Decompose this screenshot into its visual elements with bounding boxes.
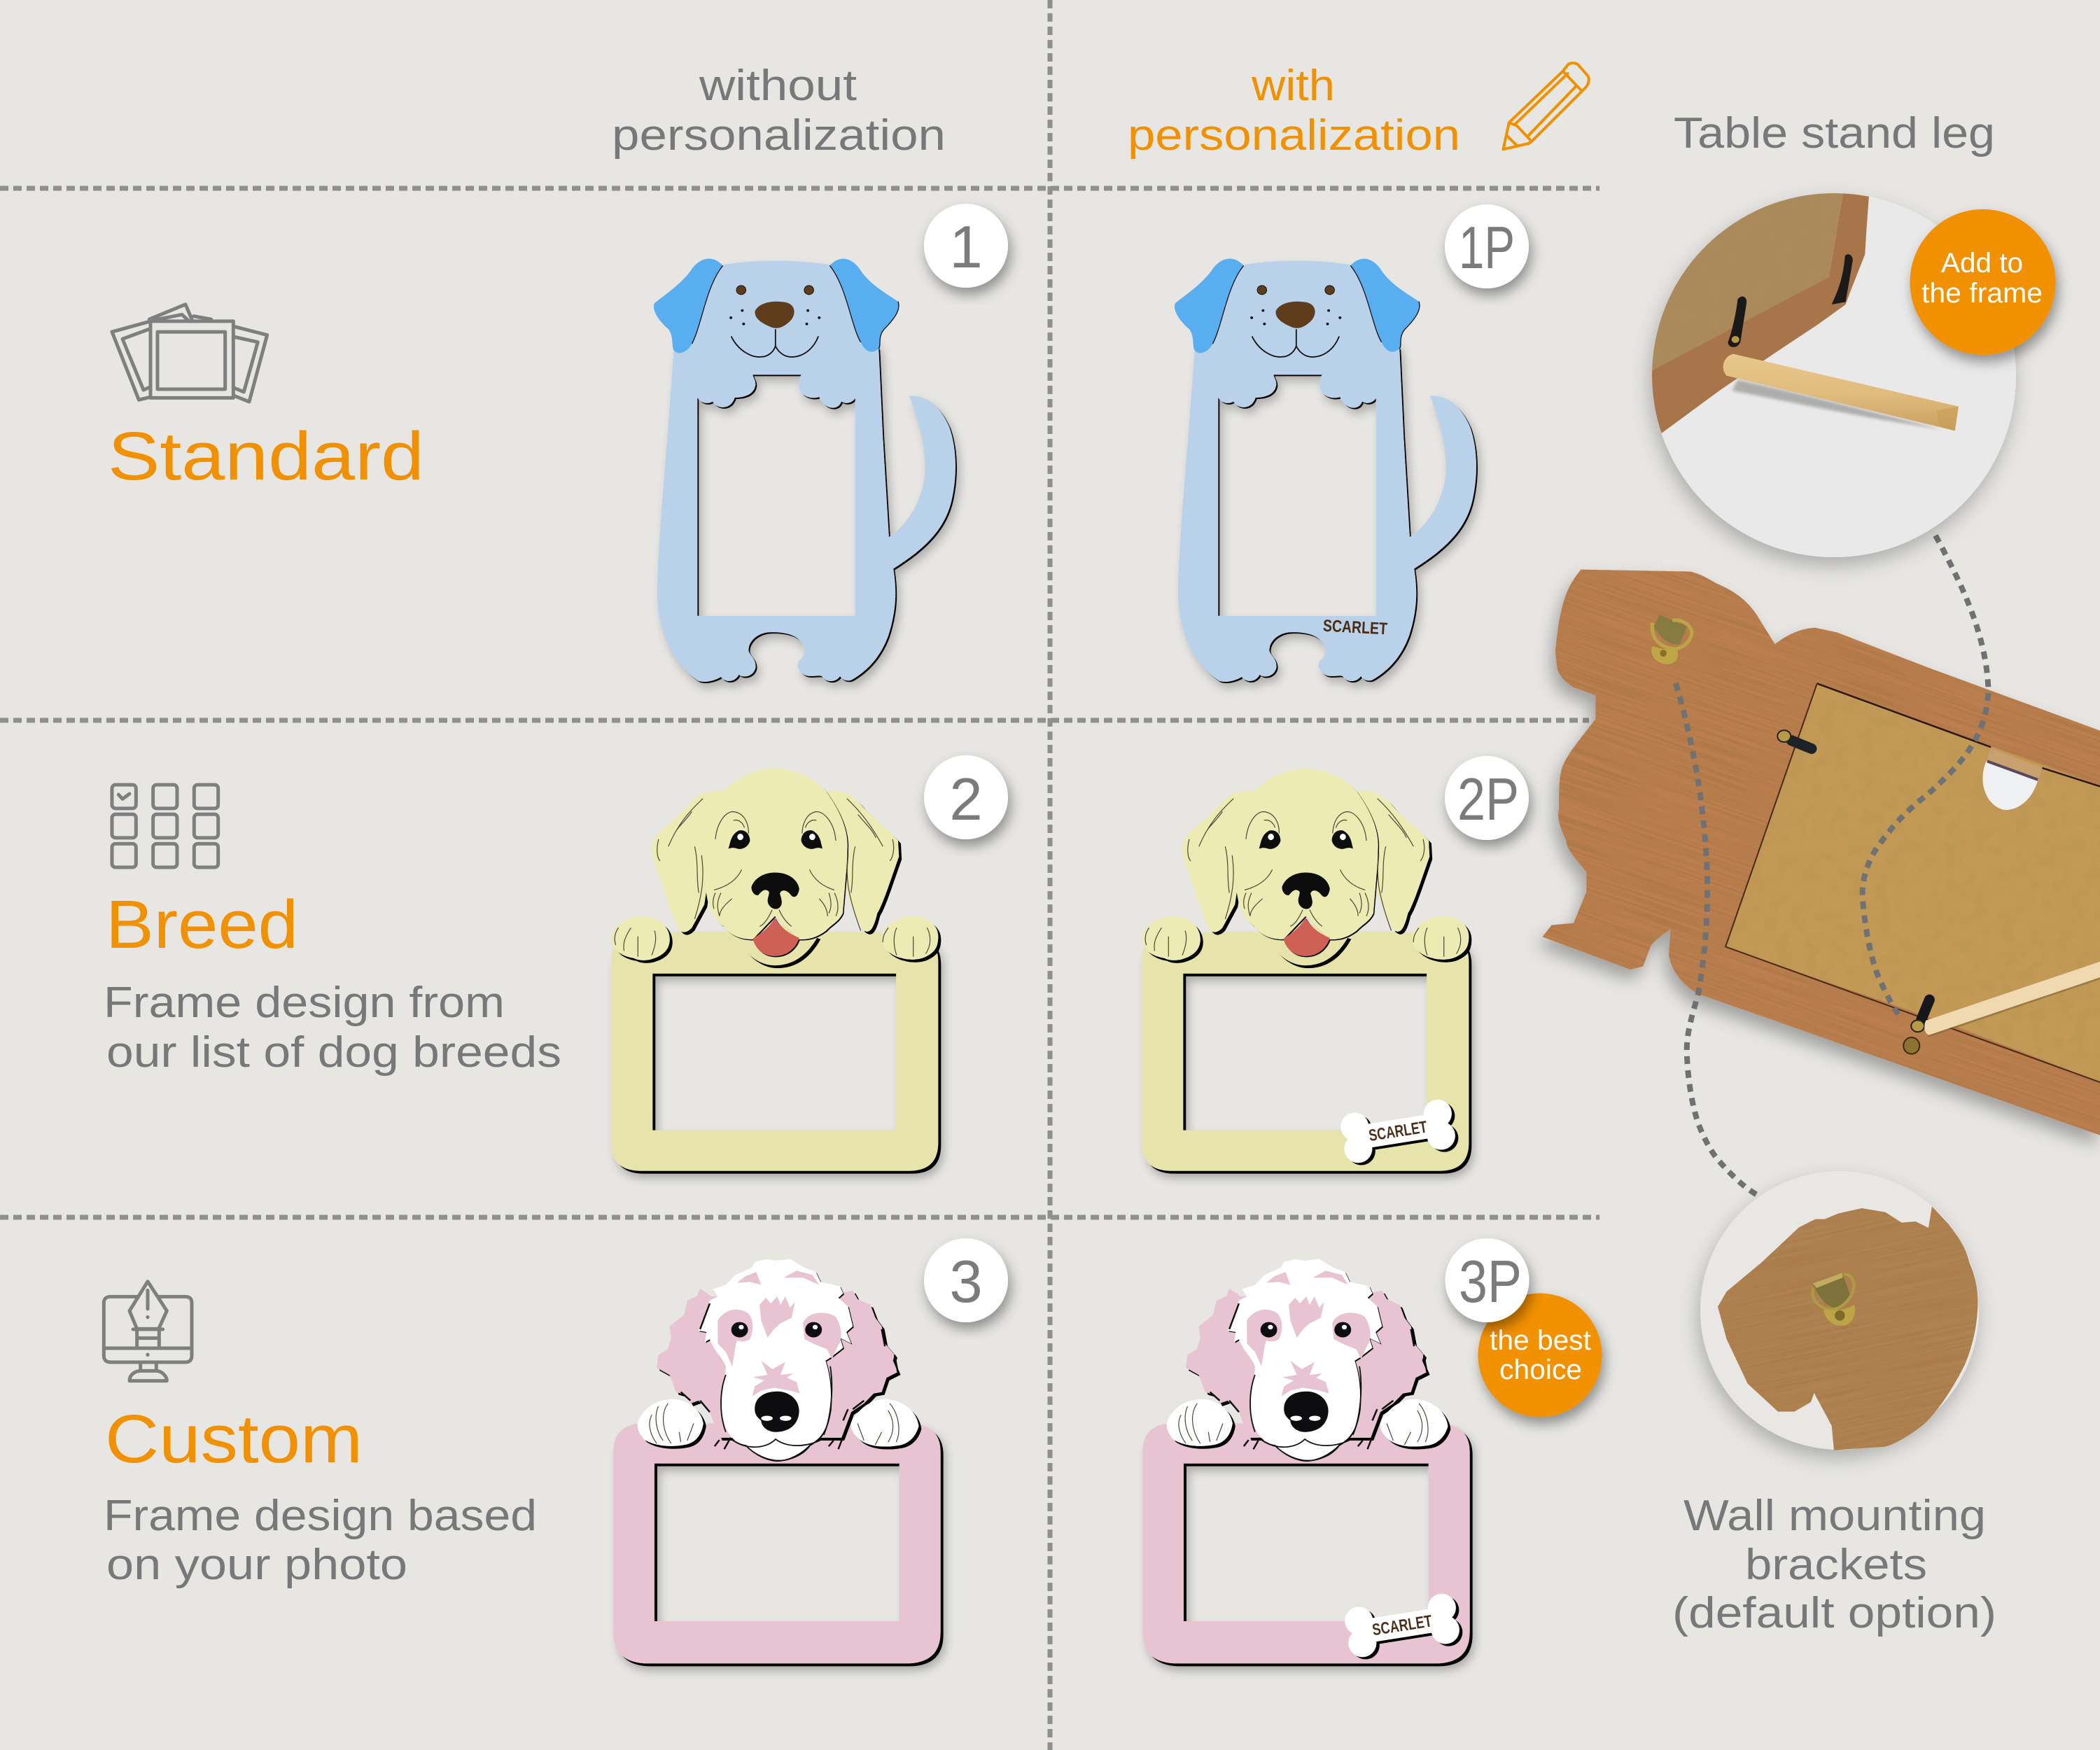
- row: breed: [104, 785, 561, 1077]
- badge: 2: [924, 755, 1008, 839]
- frame 2: breed dog: [611, 769, 938, 1171]
- clip top: [1791, 741, 1812, 749]
- description: breed: [104, 979, 561, 1077]
- description: breed: Frame design from: [104, 979, 505, 1027]
- row: custom: [104, 1282, 537, 1589]
- badge: 2: 2: [949, 766, 983, 833]
- name bone 3P: SCARLET: [1371, 1611, 1434, 1640]
- badge: 3P: [1445, 1238, 1529, 1322]
- caption: wall mounting brackets: (default option): [1672, 1589, 1996, 1637]
- icon: pencil: [1503, 63, 1589, 149]
- bracket: [1654, 615, 1687, 645]
- badge: 1P: [1445, 204, 1529, 288]
- photo circle: table stand leg: [1638, 182, 2016, 557]
- grid divider lines: [0, 0, 1600, 1750]
- badge: 3: 3: [949, 1249, 983, 1315]
- badge: 1P: 1P: [1459, 215, 1515, 281]
- column heading: with personalization: [1128, 62, 1460, 160]
- frame 3P: custom dog with name bone: [1142, 1259, 1470, 1663]
- description: custom: [104, 1492, 537, 1589]
- icon: breed grid: [112, 785, 218, 867]
- badge: the best choice: the best: [1490, 1325, 1591, 1356]
- description: breed: our list of dog breeds: [106, 1028, 561, 1077]
- icon: photo frames: [112, 304, 267, 402]
- caption: wall mounting brackets: [1672, 1492, 1996, 1637]
- column heading: with personalization: personalization: [1128, 111, 1460, 160]
- badge: 1: 1: [949, 214, 983, 281]
- badge: add to the frame: [1910, 209, 2055, 355]
- frame 2P: breed dog with name bone: [1142, 769, 1469, 1171]
- title: Standard: Standard: [108, 418, 424, 494]
- column heading: without personalization: without: [699, 62, 857, 110]
- column heading: without personalization: [612, 62, 946, 160]
- dashed connector: table stand leg: [1863, 536, 1988, 1016]
- description: custom: Frame design based: [104, 1492, 537, 1540]
- icon: monitor with pen nib: [104, 1282, 192, 1381]
- caption: wall mounting brackets: brackets: [1745, 1541, 1927, 1589]
- badge: add to the frame: Add to: [1941, 248, 2023, 279]
- description: custom: on your photo: [106, 1541, 407, 1589]
- badge: 3: [924, 1238, 1008, 1322]
- caption: wall mounting brackets: Wall mounting: [1684, 1492, 1986, 1540]
- badge: 1: [924, 204, 1008, 288]
- column heading: with personalization: with: [1251, 62, 1335, 110]
- badge: the best choice: [1478, 1294, 1602, 1417]
- frame 1P: standard dog with name: SCARLET: [1322, 617, 1388, 638]
- row: standard: [108, 304, 424, 494]
- name bone 2P: SCARLET: [1367, 1118, 1429, 1145]
- badge: 3P: 3P: [1459, 1249, 1522, 1315]
- title: Custom: Custom: [105, 1401, 363, 1477]
- dowel: [1927, 976, 2100, 1037]
- badge: the best choice: choice: [1499, 1354, 1582, 1385]
- badge: add to the frame: the frame: [1921, 278, 2043, 309]
- name bone 3P: [1343, 1592, 1462, 1659]
- badge: 2P: [1445, 756, 1529, 840]
- frame 3: custom dog: [613, 1259, 941, 1663]
- clip bottom: [1921, 1000, 1929, 1019]
- badge: 2P: 2P: [1457, 766, 1519, 833]
- photo: wooden frame back: [1535, 570, 2100, 1150]
- photo circle: wall bracket: [1688, 1170, 1987, 1468]
- column heading: without personalization: personalization: [612, 111, 946, 160]
- title: Breed: Breed: [106, 886, 298, 962]
- dashed connector: wall bracket: [1676, 683, 1757, 1195]
- frame 1: standard dog: [654, 258, 955, 682]
- frame 1P: standard dog with name: [1175, 258, 1476, 682]
- name bone 2P: [1338, 1098, 1457, 1165]
- heading: table stand leg: Table stand leg: [1674, 109, 1995, 158]
